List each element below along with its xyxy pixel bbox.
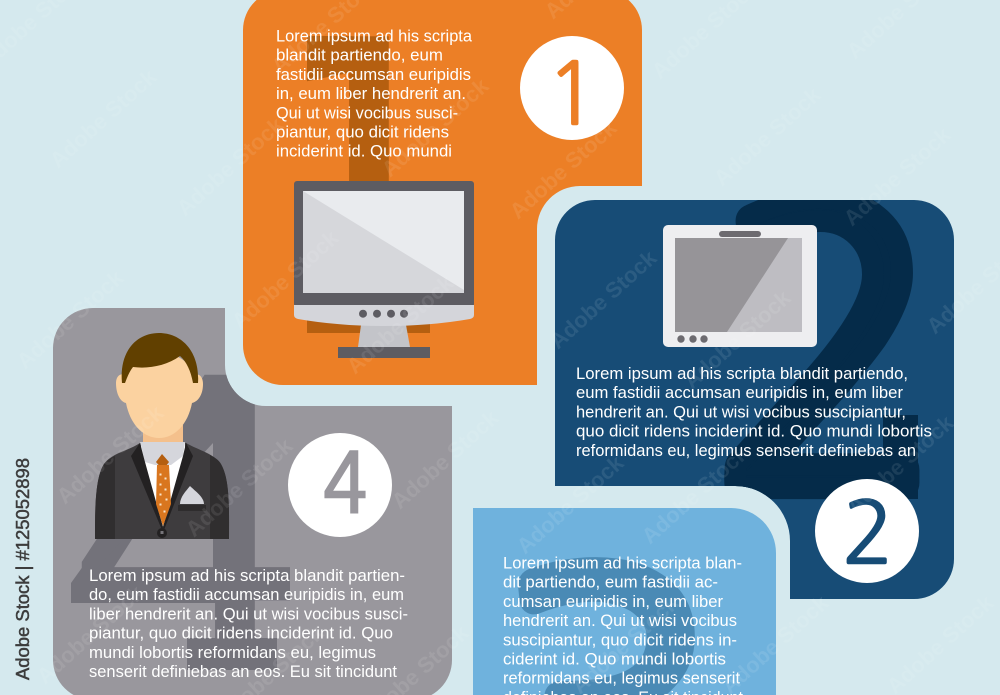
- text block 2: Lorem ipsum ad his scripta blandit partiendo,: [576, 365, 908, 383]
- ghost numeral 2: 2: [711, 158, 945, 543]
- stock watermark overlay: Adobe Stock: [842, 410, 959, 519]
- text block 4: senserit definiebas an eos. Eu sit tincidunt: [89, 663, 397, 681]
- stock watermark overlay: Adobe Stock: [709, 82, 826, 191]
- text block 1: inciderint id. Quo mundi: [276, 143, 452, 161]
- text block 4: mundi lobortis reformidans eu, legimus: [89, 644, 376, 662]
- stock watermark overlay: Adobe Stock: [679, 285, 796, 394]
- text block 1: fastidii accumsan euripidis: [276, 66, 471, 84]
- text block 2: reformidans eu, legimus senserit definiebas an: [576, 442, 916, 460]
- text block 4: piantur, quo dicit ridens inciderint id. Quo: [89, 625, 393, 643]
- panel 2: dark blue tablet: [555, 158, 954, 599]
- text block 4: do, eum fastidii accumsan euripidis in, eum: [89, 586, 404, 604]
- stock watermark overlay: Adobe Stock: [342, 270, 459, 379]
- stock watermark overlay: Adobe Stock: [839, 122, 956, 231]
- text block 3: ciderint id. Quo mundi lobortis: [503, 650, 726, 668]
- number badge 1: [520, 36, 624, 140]
- text block 2: quo dicit ridens inciderint id. Quo mundi lobortis: [576, 423, 932, 441]
- stock watermark overlay: Adobe Stock: [172, 112, 289, 221]
- panel 1: orange monitor: [243, 0, 642, 385]
- icon: desktop monitor: [294, 181, 474, 358]
- text block 1: Lorem ipsum ad his scripta: [276, 28, 473, 46]
- number badge 2: 2: [842, 490, 894, 576]
- text block 4: [89, 567, 408, 681]
- panel 3: light blue: [473, 508, 776, 695]
- icon: tablet: [663, 225, 817, 347]
- ghost numeral 1: [307, 36, 430, 333]
- stock watermark overlay: Adobe Stock: [12, 265, 129, 374]
- text block 4: Lorem ipsum ad his scripta blandit partien-: [89, 567, 405, 585]
- text block 1: blandit partiendo, eum: [276, 47, 443, 65]
- text block 2: [576, 365, 932, 460]
- text block 3: Lorem ipsum ad his scripta blan-: [503, 554, 742, 572]
- stock watermark overlay: Adobe Stock: [637, 440, 754, 549]
- stock watermark overlay: Adobe Stock: [52, 400, 169, 509]
- stock watermark overlay: Adobe Stock: [387, 405, 504, 514]
- text block 3: reformidans eu, legimus senserit: [503, 670, 740, 688]
- stock watermark overlay: Adobe Stock: [377, 73, 494, 182]
- number badge 4: [288, 433, 392, 537]
- ghost numeral 2: [724, 200, 920, 500]
- stock watermark overlay: Adobe Stock: [32, 580, 149, 689]
- text block 3: dit partiendo, eum fastidii ac-: [503, 574, 718, 592]
- text block 3: hendrerit an. Qui ut wisi vocibus: [503, 612, 737, 630]
- text block 1: in, eum liber hendrerit an.: [276, 85, 466, 103]
- text block 1: Qui ut wisi vocibus susci-: [276, 104, 458, 122]
- text block 1: piantur, quo dicit ridens: [276, 124, 449, 142]
- icon: businessman: [95, 333, 229, 539]
- stock watermark overlay: Adobe Stock: [181, 433, 298, 542]
- stock watermark overlay: Adobe Stock: [505, 115, 622, 224]
- stock watermark overlay: Adobe Stock: [545, 245, 662, 354]
- text block 3: suscipiantur, quo dicit ridens in-: [503, 631, 737, 649]
- stock watermark overlay: Adobe Stock: [45, 64, 162, 173]
- text block 2: hendrerit an. Qui ut wisi vocibus suscipiantur,: [576, 403, 906, 421]
- number badge 4: 4: [323, 440, 367, 528]
- stock id side label: Adobe Stock | #125052898: [12, 458, 33, 680]
- text block 3: cumsan euripidis in, eum liber: [503, 593, 724, 611]
- number badge 1: 1: [546, 51, 598, 137]
- stock watermark overlay: Adobe Stock: [512, 450, 629, 559]
- ghost numeral 4: [71, 374, 290, 670]
- text block 4: liber hendrerit an. Qui ut wisi vocibus susci-: [89, 605, 408, 623]
- panel 4: gray businessman: [53, 294, 452, 695]
- text block 1: [276, 28, 473, 161]
- text block 3: [503, 554, 743, 695]
- text block 2: eum fastidii accumsan euripidis in, eum liber: [576, 384, 903, 402]
- number badge 2: [815, 479, 919, 583]
- stock watermark overlay: Adobe Stock: [227, 225, 344, 334]
